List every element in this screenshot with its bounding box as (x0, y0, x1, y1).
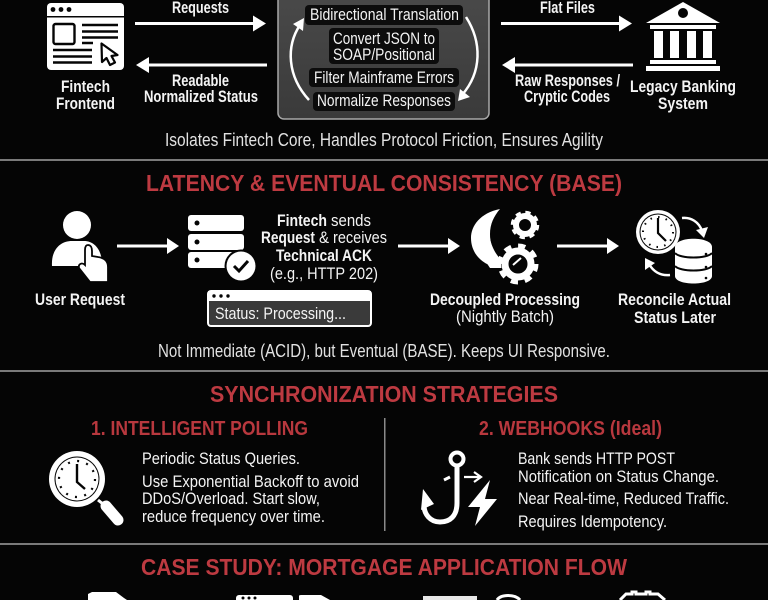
label: Decoupled Processing (Nightly Batch): (Nightly Batch) (456, 308, 554, 326)
text: polling details (142, 450, 359, 526)
text: webhook details: Notification on Status Change. (518, 468, 719, 486)
pill: Normalize Responses: Normalize Responses (317, 92, 451, 110)
pill: Bidirectional Translation: Bidirectional Translation (310, 6, 459, 24)
label: Decoupled Processing (Nightly Batch) (430, 291, 580, 326)
heading: synchronization strategies: SYNCHRONIZATION STRATEGIES (210, 381, 558, 407)
caption: gateway benefits: Isolates Fintech Core, Handles Protocol Friction, Ensures Agility (165, 129, 604, 150)
arrow: flat files to bank (501, 16, 632, 32)
text: technical ACK explanation: Technical ACK (276, 247, 372, 265)
status window: processing (208, 291, 371, 326)
panel: webhooks (421, 417, 729, 531)
label: Raw Responses / Cryptic Codes: Raw Responses / (515, 72, 620, 90)
icon: bank approval (620, 592, 665, 600)
label: Readable Normalized Status: Readable (172, 72, 229, 90)
icon: legacy bank building (646, 2, 720, 71)
subheading: intelligent polling: 1. INTELLIGENT POLLING (91, 417, 308, 440)
text: technical ACK explanation: & (319, 229, 329, 247)
heading: case study: CASE STUDY: MORTGAGE APPLICATION FLOW (141, 554, 628, 580)
icon: status window and document (236, 595, 330, 600)
text: polling details: Use Exponential Backoff to avoid (142, 473, 359, 491)
pill: Convert JSON to SOAP/Positional (329, 28, 439, 64)
text: technical ACK explanation: receives (333, 229, 387, 247)
arrow: user to server (117, 238, 179, 254)
icon: fintech frontend browser window (47, 3, 124, 70)
label: Fintech Frontend: Fintech (61, 78, 110, 96)
icon: server stack with check (188, 215, 258, 282)
label: Reconcile Actual Status Later: Status Later (634, 309, 716, 327)
text: technical ACK explanation (261, 212, 387, 283)
text: webhook details: Requires Idempotency. (518, 513, 667, 531)
section: latency and eventual consistency (35, 170, 731, 361)
text: webhook details: Bank sends HTTP POST (518, 450, 675, 468)
icon: magnifier with clock (49, 451, 118, 520)
arrow: left cycle arc (291, 18, 309, 100)
section: API gateway architecture (47, 0, 736, 150)
label: Decoupled Processing (Nightly Batch): Decoupled Processing (430, 291, 580, 309)
heading: latency and eventual consistency: LATENCY & EVENTUAL CONSISTENCY (BASE) (146, 170, 622, 196)
text: webhook details (518, 450, 729, 531)
icon: user with pointing hand (52, 211, 108, 282)
label: Raw Responses / Cryptic Codes: Cryptic Codes (524, 88, 610, 106)
label: Readable Normalized Status: Normalized Status (144, 88, 258, 106)
arrow: batch to reconcile (557, 238, 619, 254)
status window: processing: Status: Processing... (215, 305, 346, 323)
label: Raw Responses / Cryptic Codes (515, 72, 620, 106)
icon: webhook hook with lightning (421, 452, 497, 526)
arrow: ack to batch (398, 238, 460, 254)
caption: eventual consistency summary: Not Immediate (ACID), but Eventual (BASE). Keeps UI Responsive. (158, 340, 610, 361)
label: Fintech Frontend (56, 78, 115, 113)
pill: Filter Mainframe Errors: Filter Mainframe Errors (314, 69, 454, 87)
label: Legacy Banking System (630, 78, 736, 113)
icon: review screen and badge (423, 596, 520, 600)
section: synchronization strategies (49, 381, 729, 531)
label: Fintech Frontend: Frontend (56, 95, 115, 113)
text: polling details: reduce frequency over time. (142, 508, 325, 526)
text: technical ACK explanation: sends (331, 212, 371, 230)
panel: translation gateway (278, 0, 489, 119)
text: technical ACK explanation: (e.g., HTTP 202) (270, 265, 378, 283)
text: technical ACK explanation: Fintech (277, 212, 327, 230)
icon: clock and database reconcile (636, 210, 712, 284)
label: Reconcile Actual Status Later: Reconcile Actual (618, 291, 731, 309)
subheading: webhooks: 2. WEBHOOKS (Ideal) (479, 417, 662, 440)
panel: intelligent polling (49, 417, 359, 526)
arrow: right cycle arc (458, 17, 478, 101)
arrow: requests to gateway (135, 16, 266, 32)
text: polling details: DDoS/Overload. Start slow, (142, 490, 320, 508)
label: User Request: User Request (35, 291, 125, 309)
label: Legacy Banking System: System (658, 95, 708, 113)
text: webhook details: Near Real-time, Reduced Traffic. (518, 490, 729, 508)
label: Reconcile Actual Status Later (618, 291, 731, 327)
pill: Convert JSON to SOAP/Positional: SOAP/Positional (333, 46, 435, 64)
label: Readable Normalized Status (144, 72, 258, 106)
label: Legacy Banking System: Legacy Banking (630, 78, 736, 96)
pill: Convert JSON to SOAP/Positional: Convert JSON to (333, 30, 435, 48)
text: technical ACK explanation: Request (261, 229, 315, 247)
icon: moon and gears (471, 209, 537, 282)
arrow: normalized status to frontend (136, 57, 267, 73)
icon: application documents (88, 592, 127, 600)
section: case study mortgage application flow (88, 554, 665, 600)
arrow: raw responses to gateway (502, 57, 633, 73)
text: polling details: Periodic Status Queries. (142, 450, 300, 468)
